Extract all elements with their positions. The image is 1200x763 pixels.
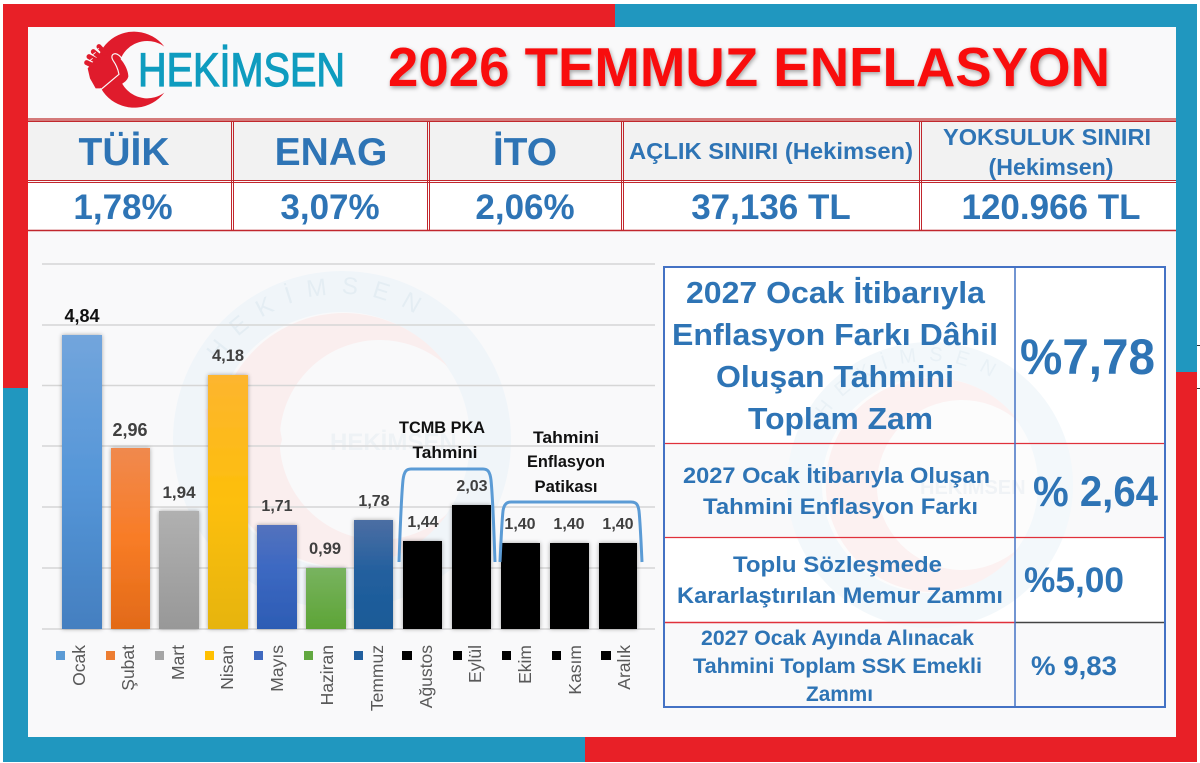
column: İTO: İTO <box>493 131 557 174</box>
row: total raise: %7,78 <box>1020 329 1155 385</box>
column: Yoksulluk sınırı: 120.966 TL <box>962 188 1140 227</box>
row: pension raise: 2027 Ocak Ayında Alınacak <box>701 627 974 650</box>
bar: Mart <box>159 511 199 629</box>
data labels: 2,03 <box>456 478 488 495</box>
column: Açlık sınırı <box>629 138 913 227</box>
grid lines <box>42 264 655 629</box>
row: total raise: Enflasyon Farkı Dâhil <box>672 317 998 352</box>
month labels: Ekim <box>515 645 535 684</box>
month labels: Ağustos <box>416 645 436 708</box>
row: inflation difference: Tahmini Enflasyon Farkı <box>703 494 978 519</box>
bar: Mayıs <box>257 525 297 629</box>
column: TÜİK <box>73 131 173 227</box>
data labels: 1,40 <box>553 516 585 533</box>
watermark: table logo <box>794 342 1066 622</box>
column: ENAG <box>275 131 387 227</box>
bar: Haziran <box>306 568 346 629</box>
callout: Tahmini Enflasyon Patikası: Enflasyon <box>527 452 605 471</box>
title: 2026 TEMMUZ ENFLASYON <box>388 36 1110 98</box>
column: Açlık sınırı: 37,136 TL <box>691 188 851 227</box>
row: civil servant raise: Toplu Sözleşmede <box>733 552 942 577</box>
row: total raise: Oluşan Tahmini <box>716 359 954 394</box>
data labels: 1,44 <box>407 514 439 531</box>
legend markers <box>56 651 611 660</box>
callout: Tahmini Enflasyon Patikası <box>500 428 642 562</box>
month labels: Mart <box>168 645 188 680</box>
month labels: Haziran <box>317 645 337 705</box>
month labels <box>69 645 634 711</box>
row: pension raise <box>693 627 1117 706</box>
row: total raise <box>672 275 1155 436</box>
callout: TCMB PKA Tahmini <box>399 418 495 562</box>
column: Yoksulluk sınırı: (Hekimsen) <box>988 154 1114 180</box>
row: total raise: Toplam Zam <box>748 401 933 436</box>
bar: Temmuz <box>354 520 393 629</box>
bar: Ağustos <box>403 541 442 629</box>
data labels: 1,78 <box>358 493 390 510</box>
icon: crescent and hands <box>87 32 164 108</box>
data labels: 1,71 <box>261 498 293 515</box>
row: inflation difference: % 2,64 <box>1033 468 1158 516</box>
column: İTO <box>475 131 575 227</box>
watermark: table logo: HEKİMSEN <box>920 476 1026 499</box>
row: civil servant raise <box>677 552 1124 608</box>
row: pension raise: Tahmini Toplam SSK Emekli <box>693 655 982 678</box>
callout: Tahmini Enflasyon Patikası: Tahmini <box>533 428 599 447</box>
row: civil servant raise: Kararlaştırılan Memur Zammı <box>677 583 1003 608</box>
month labels: Eylül <box>465 645 485 683</box>
watermark: chart logo <box>173 271 511 608</box>
bar: Kasım <box>550 543 589 629</box>
watermark: chart logo: HEKİMSEN <box>206 278 422 357</box>
bar: Ekim <box>501 543 540 629</box>
row: inflation difference <box>683 463 1158 519</box>
column: TÜİK: 1,78% <box>73 188 173 227</box>
column: İTO: 2,06% <box>475 188 575 227</box>
month labels: Aralık <box>614 645 634 690</box>
column: Yoksulluk sınırı <box>943 124 1151 227</box>
callout: TCMB PKA Tahmini: TCMB PKA <box>399 418 485 437</box>
panel: indicators table <box>28 118 1176 230</box>
data labels: 1,40 <box>504 516 536 533</box>
column: ENAG: 3,07% <box>280 188 380 227</box>
month labels: Kasım <box>565 645 585 695</box>
data labels: 4,84 <box>64 306 100 326</box>
data labels: 0,99 <box>309 540 341 558</box>
row: civil servant raise: %5,00 <box>1024 561 1124 600</box>
data labels: 1,40 <box>602 516 634 533</box>
logo wordmark: HEKİMSEN <box>138 43 345 96</box>
column: ENAG: ENAG <box>275 131 387 174</box>
callout: Tahmini Enflasyon Patikası: Patikası <box>534 477 598 496</box>
bar: Ocak <box>62 335 102 629</box>
row: total raise: 2027 Ocak İtibarıyla <box>686 275 986 310</box>
month labels: Nisan <box>217 645 237 690</box>
row: inflation difference: 2027 Ocak İtibarıyla Oluşan <box>683 463 990 488</box>
data labels: 4,18 <box>212 347 244 365</box>
row: pension raise: Zammı <box>806 683 873 706</box>
callout: TCMB PKA Tahmini: Tahmini <box>412 443 478 462</box>
column: Açlık sınırı: AÇLIK SINIRI (Hekimsen) <box>629 138 913 164</box>
row: pension raise: % 9,83 <box>1031 651 1117 681</box>
panel: raise table <box>663 266 1166 708</box>
data labels <box>64 306 634 558</box>
bar: Nisan <box>208 375 248 629</box>
month labels: Ocak <box>69 645 89 686</box>
column: TÜİK: TÜİK <box>78 131 170 174</box>
column: Yoksulluk sınırı: YOKSULUK SINIRI <box>943 124 1151 150</box>
bar: Eylül <box>452 505 491 629</box>
watermark: chart logo: HEKİMSEN <box>330 429 457 456</box>
logo: Hekimsen <box>87 32 345 108</box>
month labels: Temmuz <box>367 645 387 711</box>
bar chart <box>42 264 655 711</box>
month labels: Şubat <box>118 645 138 691</box>
bar: Aralık <box>599 543 637 629</box>
bar: Şubat <box>111 448 150 629</box>
month labels: Mayıs <box>267 645 287 692</box>
data labels: 2,96 <box>112 420 148 440</box>
data labels: 1,94 <box>162 483 196 502</box>
watermark: table logo: HEKİMSEN <box>816 347 996 412</box>
